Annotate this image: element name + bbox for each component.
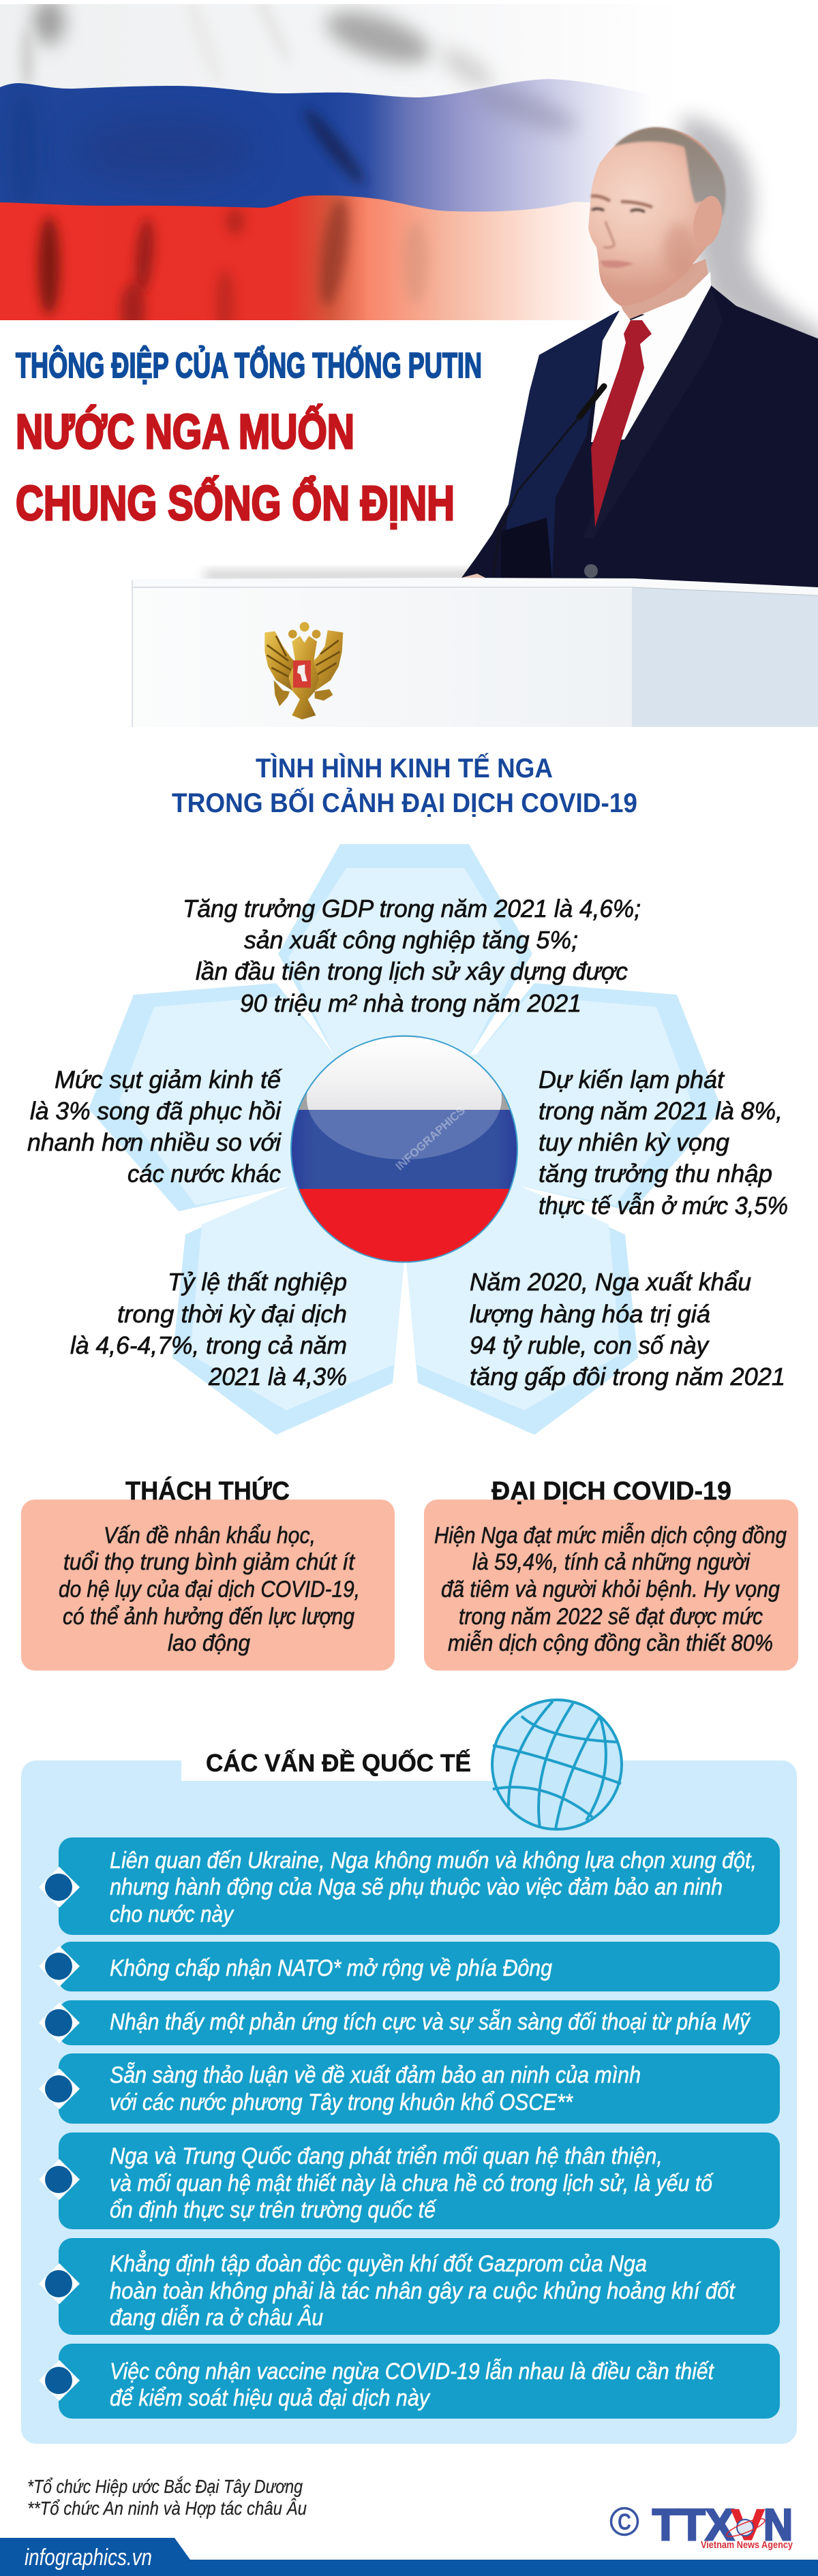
bullet xyxy=(39,1946,80,1987)
jacket xyxy=(461,285,818,593)
hand xyxy=(461,574,485,580)
text: exports: 94 tỷ ruble, con số này xyxy=(470,1331,710,1359)
petal: right xyxy=(476,983,722,1211)
podium xyxy=(132,578,818,727)
logo: TTXVN: N xyxy=(763,2500,793,2549)
text: hoàn toàn không phải là tác nhân gây ra cuộc khủng hoảng khí đốt xyxy=(110,2278,736,2304)
text: exports: tăng gấp đôi trong năm 2021 xyxy=(470,1363,785,1391)
bullet xyxy=(39,2159,80,2200)
text: exports: Năm 2020, Nga xuất khẩu xyxy=(470,1268,751,1296)
text xyxy=(110,2062,641,2115)
text: economic decline xyxy=(27,1066,283,1188)
text: GDP growth: sản xuất công nghiệp tăng 5%; xyxy=(244,926,578,954)
text: challenges xyxy=(59,1523,360,1656)
logo: TTXVN xyxy=(611,2500,793,2551)
hair xyxy=(614,127,725,217)
text: COVID-19 pandemic: trong năm 2022 sẽ đạt được mức xyxy=(459,1604,763,1630)
text: GDP growth: 90 triệu m² nhà trong năm 2021 xyxy=(240,989,581,1017)
subtitle line: THÔNG ĐIỆP CỦA TỔNG THỐNG PUTIN xyxy=(16,345,482,386)
text: challenges: tuổi thọ trung bình giảm chút ít xyxy=(63,1549,355,1575)
heading: economy xyxy=(172,752,637,818)
petal: bottom left xyxy=(172,1186,404,1435)
item 5: China xyxy=(39,2132,780,2229)
text: và mối quan hệ mật thiết này là chưa hề có trong lịch sử, là yếu tố xyxy=(110,2171,714,2197)
item 1: Ukraine xyxy=(39,1837,780,1935)
text: COVID-19 pandemic: đã tiêm và người khỏi bệnh. Hy vọng xyxy=(441,1577,780,1602)
text: challenges: do hệ lụy của đại dịch COVID-19, xyxy=(59,1577,360,1602)
text: unemployment: trong thời kỳ đại dịch xyxy=(117,1300,347,1328)
bullet xyxy=(39,2360,80,2401)
text: challenges: Vấn đề nhân khẩu học, xyxy=(104,1523,316,1549)
text: challenges: lao động xyxy=(168,1630,250,1656)
text: unemployment: là 4,6-4,7%, trong cả năm xyxy=(70,1331,347,1359)
text: inflation: tuy nhiên kỳ vọng xyxy=(539,1128,729,1156)
microphone xyxy=(579,386,604,417)
text: GDP growth: Tăng trưởng GDP trong năm 2021 là 4,6%; xyxy=(183,895,641,922)
text xyxy=(110,2143,714,2223)
text xyxy=(110,2251,736,2331)
icon: Russian flag sphere xyxy=(286,1032,522,1265)
website: infographics.vn xyxy=(25,2545,152,2571)
item 7: vaccine xyxy=(39,2344,780,2419)
item 6: Gazprom xyxy=(39,2238,780,2335)
petal: left xyxy=(89,983,334,1211)
president portrait xyxy=(461,127,818,593)
icon: Russian flag sphere: INFOGRAPHICS xyxy=(393,1104,468,1173)
text: inflation: tăng trưởng thu nhập xyxy=(539,1160,772,1188)
text xyxy=(110,2359,714,2411)
text: để kiểm soát hiệu quả đại dịch này xyxy=(110,2385,431,2411)
petal: bottom right xyxy=(406,1186,638,1435)
shadow above the podium xyxy=(204,571,477,580)
shadow behind the president xyxy=(682,116,818,382)
text: economic decline: các nước khác xyxy=(127,1160,281,1188)
logo: TTXVN: V xyxy=(731,2500,765,2549)
bullet xyxy=(39,2068,80,2109)
ear xyxy=(689,193,726,249)
text xyxy=(110,1848,757,1927)
text: GDP growth xyxy=(183,895,641,1017)
text: exports: lượng hàng hóa trị giá xyxy=(470,1300,710,1328)
text: COVID-19 pandemic: miễn dịch cộng đồng cần thiết 80% xyxy=(448,1630,773,1656)
logo: TTXVN: TTX xyxy=(652,2500,734,2549)
face shading xyxy=(663,223,693,275)
text: COVID-19 pandemic: là 59,4%, tính cả những người xyxy=(472,1549,751,1575)
item 3: United States xyxy=(39,2000,780,2045)
copyright mark xyxy=(611,2509,638,2535)
text: Việc công nhận vaccine ngừa COVID-19 lẫn nhau là điều cần thiết xyxy=(110,2359,714,2385)
footnotes: **Tổ chức An ninh và Hợp tác châu Âu xyxy=(27,2498,307,2519)
text: COVID-19 pandemic xyxy=(434,1523,787,1656)
text: Sẵn sàng thảo luận về đề xuất đảm bảo an ninh của mình xyxy=(110,2062,641,2088)
main title line 2: CHUNG SỐNG ỔN ĐỊNH xyxy=(16,476,455,531)
header: waving Russian flag xyxy=(0,4,637,320)
tie xyxy=(591,320,652,527)
logo: TTXVN: Vietnam News Agency xyxy=(701,2539,793,2551)
icon: globe xyxy=(492,1700,622,1829)
text: Nga và Trung Quốc đang phát triển mối quan hệ thân thiện, xyxy=(110,2143,663,2169)
text: exports xyxy=(470,1268,785,1391)
text: Liên quan đến Ukraine, Nga không muốn và không lựa chọn xung đột, xyxy=(110,1848,757,1874)
copyright mark: C xyxy=(618,2509,631,2535)
flower diagram petals xyxy=(89,844,722,1435)
text: cho nước này xyxy=(110,1902,234,1927)
neck xyxy=(617,259,710,320)
main title line 1: NƯỚC NGA MUỐN xyxy=(16,405,354,459)
text: economic decline: Mức sụt giảm kinh tế xyxy=(55,1066,283,1093)
text: nhưng hành động của Nga sẽ phụ thuộc vào việc đảm bảo an ninh xyxy=(110,1874,723,1900)
panel: international issues xyxy=(21,1700,797,2444)
heading: international issues: CÁC VẤN ĐỀ QUỐC TẾ xyxy=(206,1748,471,1777)
title xyxy=(16,345,482,531)
text: inflation xyxy=(539,1066,788,1220)
item 2: NATO xyxy=(39,1942,780,1991)
head xyxy=(588,127,725,306)
text: GDP growth: lần đầu tiên trong lịch sử xây dựng được xyxy=(196,957,628,985)
footnotes: *Tổ chức Hiệp ước Bắc Đại Tây Dương xyxy=(27,2476,303,2497)
footnotes xyxy=(27,2476,307,2519)
text: inflation: trong năm 2021 là 8%, xyxy=(539,1097,783,1125)
text: Nhận thấy một phản ứng tích cực và sự sẵn sàng đối thoại từ phía Mỹ xyxy=(110,2009,751,2035)
text: đang diễn ra ở châu Âu xyxy=(110,2305,323,2331)
icon: Russian coat of arms xyxy=(264,622,343,719)
text: inflation: thực tế vẫn ở mức 3,5% xyxy=(539,1192,788,1220)
petal: top xyxy=(278,844,532,1055)
text: unemployment: Tỷ lệ thất nghiệp xyxy=(168,1268,347,1296)
face details xyxy=(591,196,652,268)
bullet xyxy=(39,1867,80,1908)
panel: challenges xyxy=(21,1476,395,1671)
heading: economy: TRONG BỐI CẢNH ĐẠI DỊCH COVID-19 xyxy=(172,787,637,818)
text: Khẳng định tập đoàn độc quyền khí đốt Gazprom của Nga xyxy=(110,2251,647,2277)
text: economic decline: là 3% song đã phục hồi xyxy=(30,1097,282,1125)
text: unemployment xyxy=(70,1268,347,1391)
panel: COVID-19 pandemic xyxy=(424,1477,798,1671)
heading: COVID-19 pandemic: ĐẠI DỊCH COVID-19 xyxy=(491,1477,731,1506)
footer bar xyxy=(0,2538,818,2576)
text: inflation: Dự kiến lạm phát xyxy=(539,1066,725,1093)
heading: challenges: THÁCH THỨC xyxy=(125,1476,290,1506)
bullet xyxy=(39,2263,80,2304)
button xyxy=(584,564,598,578)
text: challenges: có thể ảnh hưởng đến lực lượng xyxy=(63,1604,354,1630)
text: Không chấp nhận NATO* mở rộng về phía Đông xyxy=(110,1955,552,1981)
bullet xyxy=(39,2002,80,2043)
text: với các nước phương Tây trong khuôn khổ OSCE** xyxy=(110,2090,574,2115)
text: economic decline: nhanh hơn nhiều so với xyxy=(27,1128,282,1156)
text: ổn định thực sự trên trường quốc tế xyxy=(110,2197,437,2223)
shirt xyxy=(591,272,711,442)
item 4: OSCE xyxy=(39,2053,780,2124)
heading: economy: TÌNH HÌNH KINH TẾ NGA xyxy=(256,752,553,783)
text: unemployment: 2021 là 4,3% xyxy=(208,1363,347,1391)
